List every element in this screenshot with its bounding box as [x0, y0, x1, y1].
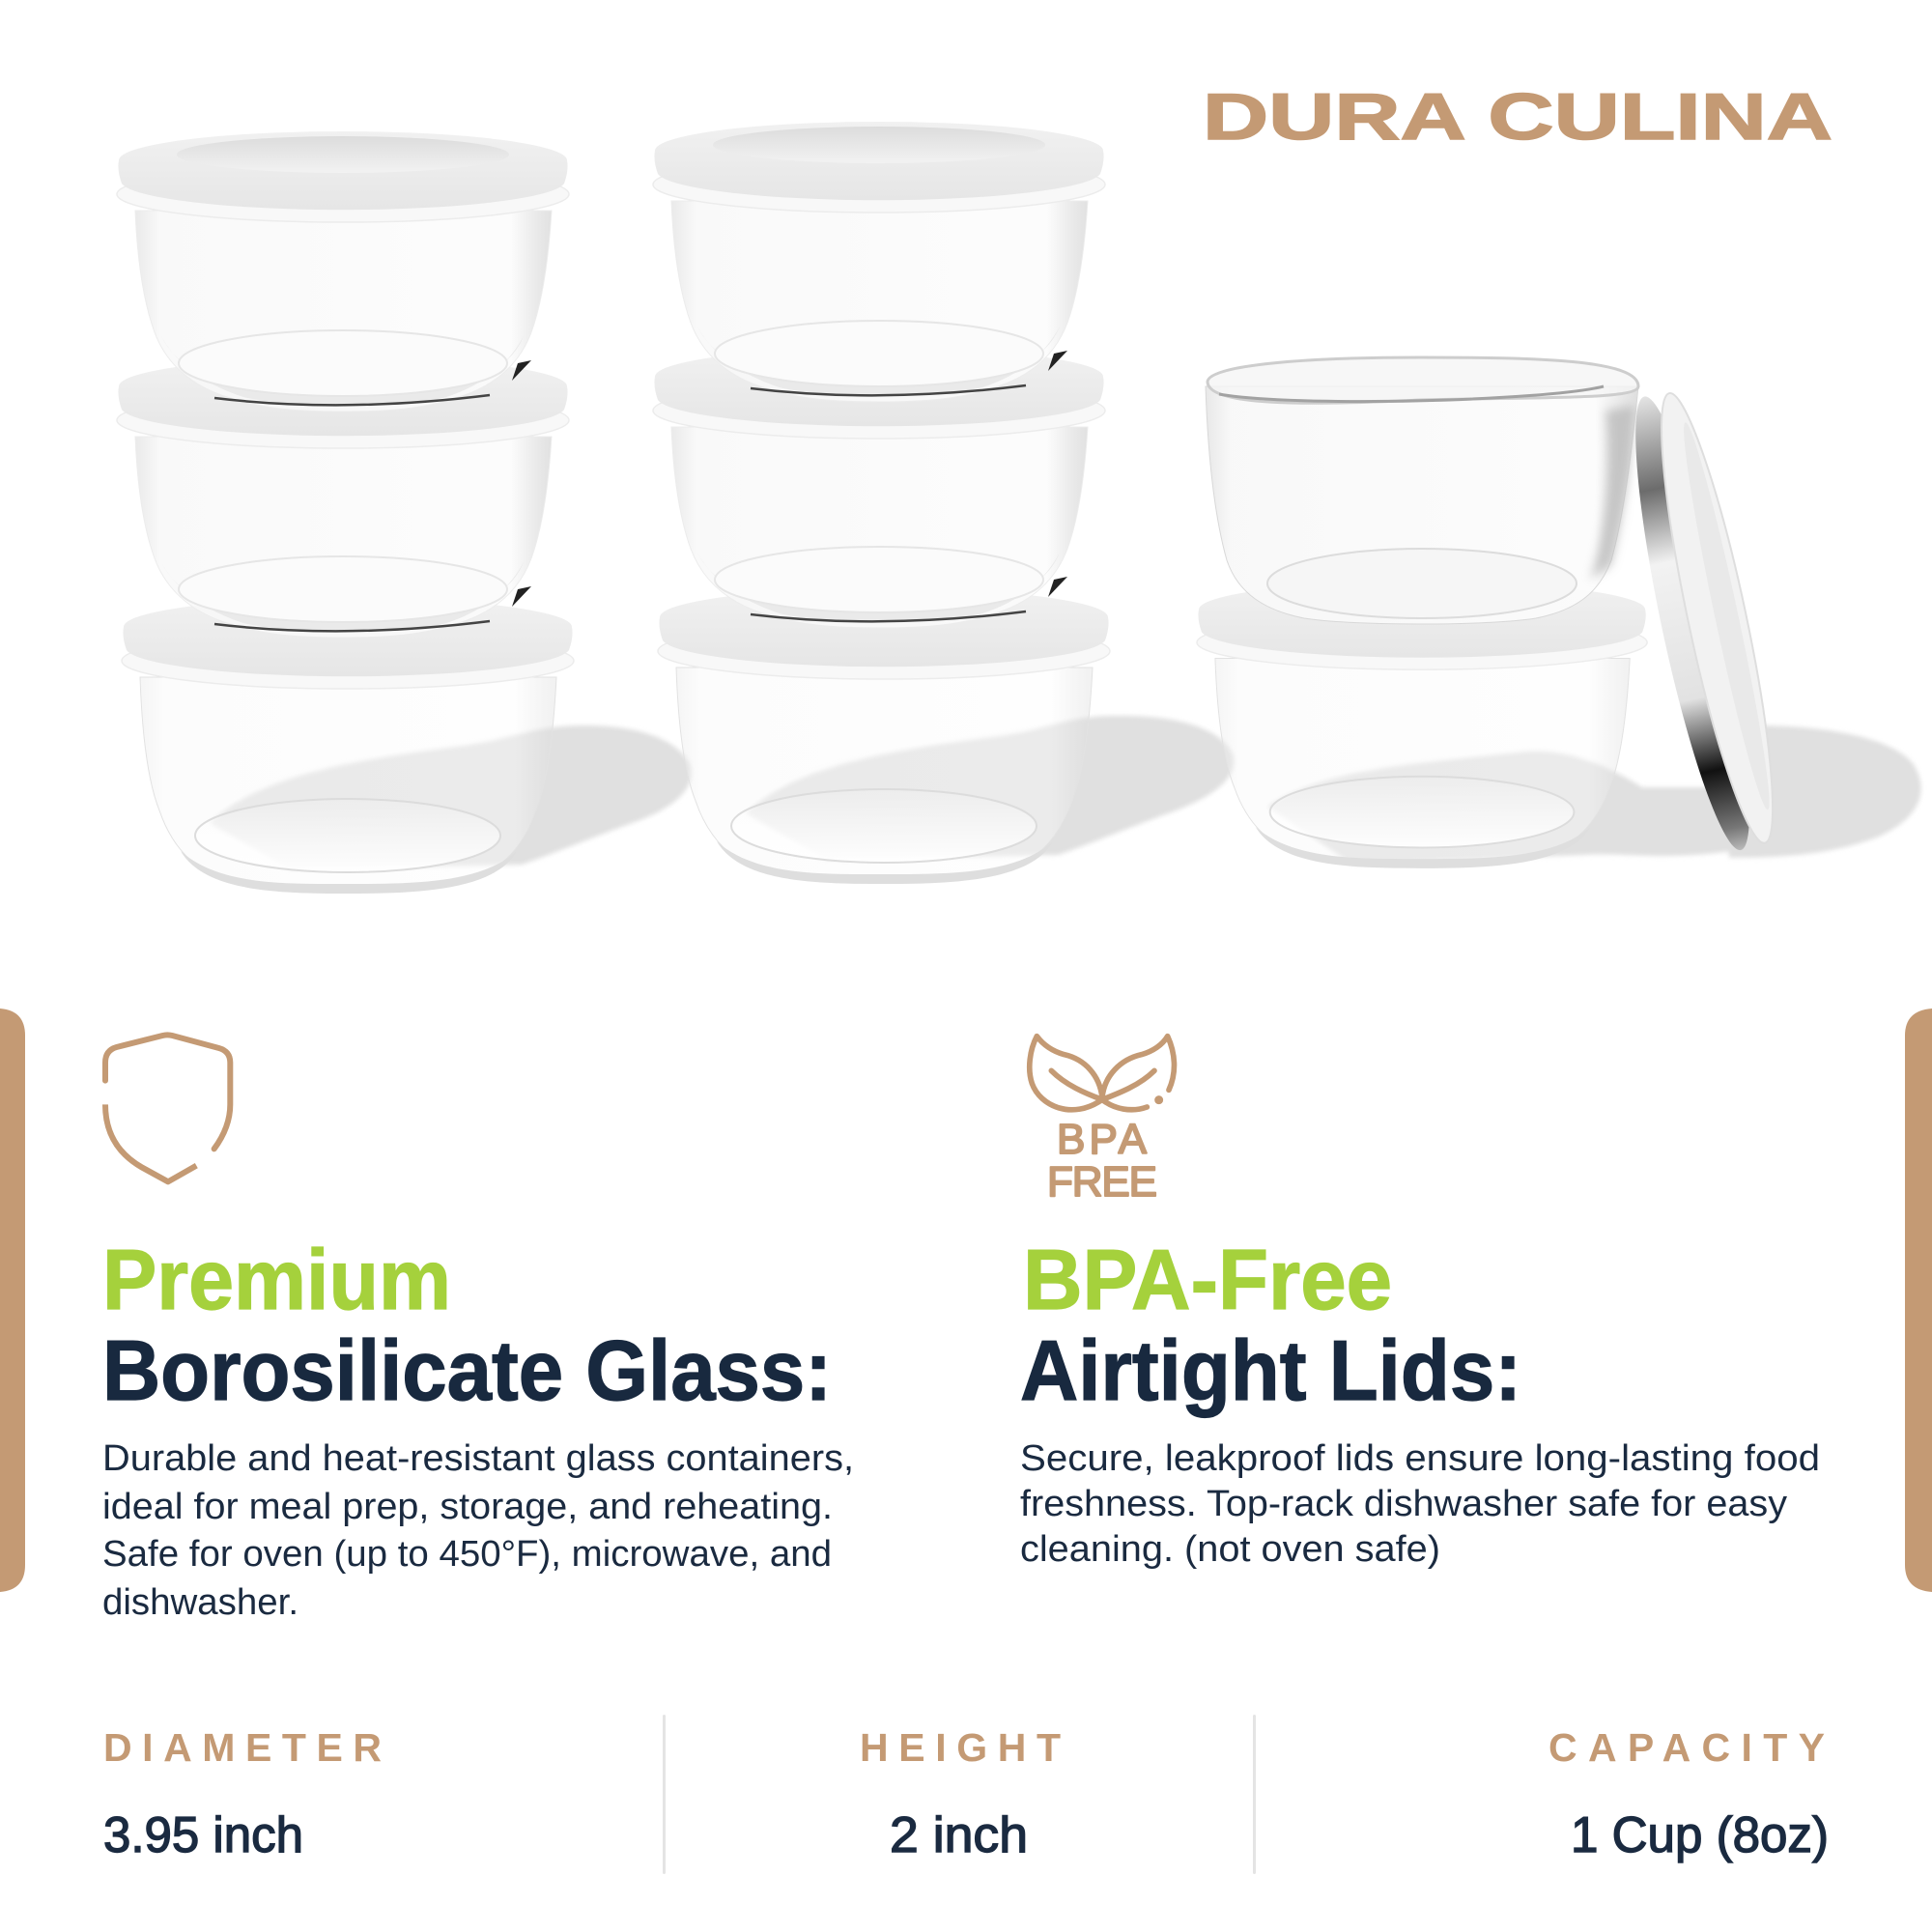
heading: BPA-Free [1023, 1232, 1392, 1327]
icon: shield [105, 1035, 230, 1181]
right accent bar [1905, 1009, 1932, 1592]
brand name: DURA CULINA [1203, 80, 1833, 154]
icon: BPA free leaves [1030, 1037, 1174, 1206]
top container [653, 122, 1105, 402]
top container [117, 131, 569, 412]
spec: capacity: 1 Cup (8oz) [1571, 1807, 1829, 1863]
heading: Airtight Lids: [1020, 1322, 1521, 1418]
shadow: second stack [746, 716, 1234, 860]
bottom container [1197, 582, 1647, 868]
spec: height: HEIGHT [860, 1725, 1061, 1770]
description: ideal for meal prep, storage, and reheating. [102, 1487, 833, 1527]
bottom container [658, 588, 1110, 884]
heading: Borosilicate Glass: [102, 1322, 832, 1418]
spec: diameter: 3.95 inch [103, 1807, 303, 1863]
shadow: leaning lid [1719, 725, 1921, 858]
floor shadows [210, 716, 1921, 869]
panel: borosilicate glass [102, 1232, 854, 1623]
spec: capacity [1548, 1725, 1829, 1863]
shadow: first stack [210, 725, 692, 869]
description: Durable and heat-resistant glass containers, [102, 1438, 854, 1479]
shadow: third stack inside bowl [1267, 752, 1739, 865]
description [102, 1438, 854, 1623]
middle container [117, 357, 569, 638]
column dividers [663, 1715, 1256, 1874]
spec: diameter [103, 1725, 382, 1863]
panel: BPA-free lids [1020, 1232, 1820, 1570]
description: dishwasher. [102, 1582, 298, 1623]
middle container [653, 348, 1105, 628]
spec: height [860, 1725, 1061, 1863]
photo: open container on lidded container, right [1197, 357, 1794, 868]
open glass bowl [1206, 357, 1638, 624]
description: Secure, leakproof lids ensure long-lasting food [1020, 1438, 1820, 1479]
bottom container [122, 598, 574, 894]
leaves [1030, 1037, 1174, 1110]
leaning lid [1614, 385, 1794, 857]
description [1020, 1438, 1820, 1570]
icon: BPA free leaves: FREE [1047, 1158, 1157, 1206]
left accent bar [0, 1009, 25, 1592]
description: cleaning. (not oven safe) [1020, 1529, 1440, 1570]
heading [102, 1232, 832, 1418]
spec: capacity: CAPACITY [1548, 1725, 1825, 1770]
spec: diameter: DIAMETER [103, 1725, 382, 1770]
description: Safe for oven (up to 450°F), microwave, and [102, 1534, 832, 1575]
heading [1020, 1232, 1521, 1418]
photo: stack of three containers, centre [653, 122, 1110, 884]
badge text: BPA [1057, 1116, 1148, 1163]
spec: height: 2 inch [890, 1807, 1028, 1863]
description: freshness. Top-rack dishwasher safe for easy [1020, 1484, 1787, 1524]
photo: stack of three containers, left [117, 131, 574, 894]
heading: Premium [102, 1232, 451, 1327]
